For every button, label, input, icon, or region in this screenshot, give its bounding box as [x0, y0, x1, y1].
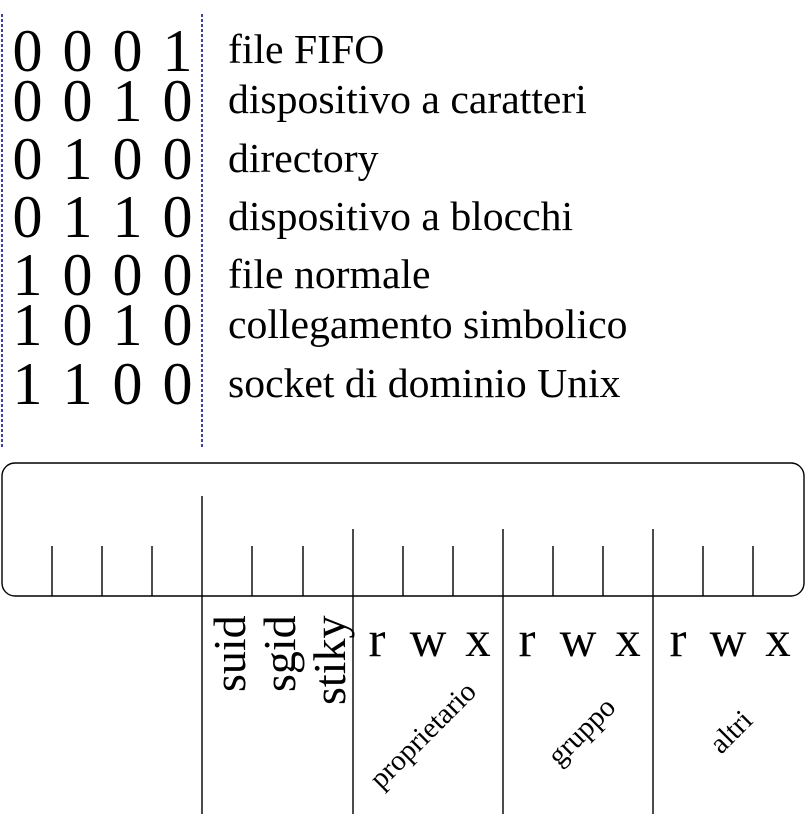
row: 1010: 1	[12, 292, 42, 358]
others rwx	[670, 612, 791, 668]
special bits labels	[204, 615, 355, 705]
row: 0110: 1	[62, 184, 92, 250]
label: suid: suid	[204, 615, 255, 692]
owner rwx: r	[369, 612, 386, 668]
row: 1100	[12, 351, 192, 417]
row: 0010: 1	[112, 68, 142, 134]
row: 1000: 0	[162, 242, 192, 308]
row: 1000: 0	[112, 242, 142, 308]
row: 1010: 0	[162, 292, 192, 358]
row: 0010: 0	[162, 68, 192, 134]
label: collegamento simbolico: collegamento simbolico	[228, 302, 627, 348]
permission group labels	[363, 676, 759, 795]
label: sgid: sgid	[254, 615, 305, 692]
group rwx: r	[519, 612, 536, 668]
label: altri: altri	[703, 704, 759, 760]
row: 0001: 0	[12, 18, 42, 84]
label: dispositivo a blocchi: dispositivo a blocchi	[228, 194, 573, 240]
row: 1100: 0	[112, 351, 142, 417]
label: directory: directory	[228, 136, 379, 182]
row: 0110: 1	[112, 184, 142, 250]
row: 0100: 0	[112, 126, 142, 192]
label: dispositivo a caratteri: dispositivo a caratteri	[228, 77, 587, 123]
row: 0110: 0	[12, 184, 42, 250]
permission letters	[369, 612, 791, 668]
row: 0110	[12, 184, 192, 250]
row: 0100: 1	[62, 126, 92, 192]
label: file FIFO: file FIFO	[228, 27, 384, 73]
row: 1100: 1	[12, 351, 42, 417]
row: 0001: 0	[62, 18, 92, 84]
row: 1000: 1	[12, 242, 42, 308]
row: 0100	[12, 126, 192, 192]
label: proprietario: proprietario	[363, 676, 483, 795]
group rwx: w	[560, 612, 597, 668]
row: 0010: 0	[12, 68, 42, 134]
others rwx: w	[710, 612, 747, 668]
dotted guide lines around file type bits	[2, 14, 202, 447]
file type labels	[228, 27, 627, 407]
row: 1010	[12, 292, 192, 358]
row: 0110: 0	[162, 184, 192, 250]
label: stiky: stiky	[304, 616, 355, 705]
row: 1100: 0	[162, 351, 192, 417]
row: 1000: 0	[62, 242, 92, 308]
label: gruppo: gruppo	[541, 691, 622, 772]
others rwx: x	[765, 612, 791, 668]
file type bit table	[12, 18, 192, 417]
group rwx	[519, 612, 641, 668]
register box with bit dividers	[2, 463, 804, 814]
row: 1010: 0	[62, 292, 92, 358]
row: 0100: 0	[12, 126, 42, 192]
row: 0010: 0	[62, 68, 92, 134]
others rwx: r	[670, 612, 687, 668]
row: 0100: 0	[162, 126, 192, 192]
row: 0001: 0	[112, 18, 142, 84]
group rwx: x	[615, 612, 641, 668]
owner rwx	[369, 612, 491, 668]
label: socket di dominio Unix: socket di dominio Unix	[228, 361, 621, 407]
row: 1100: 1	[62, 351, 92, 417]
row: 0001	[12, 18, 192, 84]
owner rwx: w	[410, 612, 447, 668]
owner rwx: x	[465, 612, 491, 668]
row: 1000	[12, 242, 192, 308]
row: 0010	[12, 68, 192, 134]
row: 0001: 1	[162, 18, 192, 84]
row: 1010: 1	[112, 292, 142, 358]
label: file normale: file normale	[228, 252, 431, 298]
